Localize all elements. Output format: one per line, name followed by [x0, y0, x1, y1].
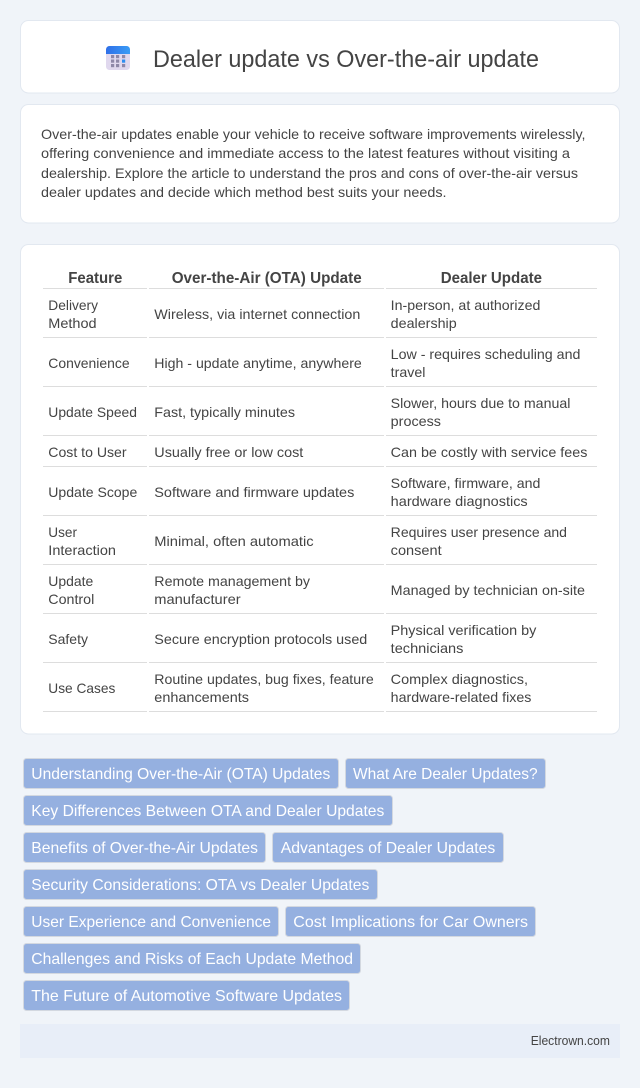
tag: security: Security Considerations: OTA vs Dealer Updates — [31, 877, 369, 894]
row: delivery method: Method — [48, 315, 97, 331]
tag: advantages: Advantages of Dealer Updates — [281, 840, 495, 857]
row: update speed: Fast, typically minutes — [154, 404, 295, 420]
tag: future — [24, 980, 350, 1010]
row: user interaction: Interaction — [48, 542, 116, 558]
row: update scope: Software and firmware updates — [154, 484, 354, 500]
row: update control: Remote management by — [154, 573, 310, 589]
panel: introduction — [20, 104, 620, 223]
row: update scope: Software, firmware, and — [391, 475, 540, 491]
row: delivery method: Delivery — [48, 297, 98, 313]
tag: key differences: Key Differences Between OTA and Dealer Updates — [31, 803, 384, 820]
row: convenience: travel — [391, 364, 425, 380]
row: update control: Managed by technician on-site — [391, 582, 585, 598]
row: cost to user — [48, 444, 587, 460]
tag: key differences — [24, 796, 392, 826]
row: safety: Physical verification by — [391, 622, 536, 638]
tag: future: The Future of Automotive Software Updates — [31, 988, 342, 1005]
row: update control — [48, 573, 585, 607]
tag: what are dealer updates: What Are Dealer Updates? — [353, 766, 538, 783]
row: update control: Control — [48, 591, 94, 607]
row: convenience: Convenience — [48, 355, 130, 371]
footer: Electrown.com — [531, 1034, 610, 1048]
row: delivery method — [48, 297, 540, 331]
row: update speed: process — [391, 413, 441, 429]
tag: understanding OTA: Understanding Over-the-Air (OTA) Updates — [31, 766, 330, 783]
row: use cases — [48, 671, 531, 705]
intro text — [41, 126, 586, 200]
tag: user experience: User Experience and Convenience — [31, 914, 271, 931]
table header: Feature — [68, 270, 122, 287]
row: use cases: Use Cases — [48, 680, 115, 696]
tag: benefits — [24, 832, 266, 862]
icon: calendar — [106, 46, 130, 70]
row: use cases: Complex diagnostics, — [391, 671, 528, 687]
row: use cases: enhancements — [154, 689, 249, 705]
row: user interaction — [48, 524, 567, 558]
row: update speed — [48, 395, 570, 429]
row: convenience: High - update anytime, anywhere — [154, 355, 362, 371]
row: cost to user: Can be costly with service fees — [391, 444, 587, 460]
table rule lines — [43, 288, 597, 712]
table header: Dealer Update — [441, 270, 542, 287]
row: cost to user: Usually free or low cost — [154, 444, 303, 460]
tag: security — [24, 870, 378, 900]
intro text: Over-the-air updates enable your vehicle to receive software improvements wirelessly, — [41, 126, 586, 142]
row: safety: technicians — [391, 640, 463, 656]
table header: Over-the-Air (OTA) Update — [172, 270, 362, 287]
footer — [20, 1024, 620, 1058]
title text: Dealer update vs Over-the-air update — [153, 46, 539, 73]
row: use cases: hardware-related fixes — [391, 689, 531, 705]
row: safety: Secure encryption protocols used — [154, 631, 367, 647]
tag: challenges — [24, 944, 360, 974]
row: user interaction: consent — [391, 542, 442, 558]
row: safety — [48, 622, 536, 656]
intro text: offering convenience and immediate access to the latest features without visiting a — [41, 145, 570, 161]
row: cost to user: Cost to User — [48, 444, 127, 460]
row: update scope: Update Scope — [48, 484, 138, 500]
intro text: dealership. Explore the article to understand the pros and cons of over-the-air versus — [41, 165, 578, 181]
row: convenience: Low - requires scheduling and — [391, 346, 580, 362]
row: update scope — [48, 475, 540, 509]
row: user interaction: Minimal, often automatic — [154, 533, 314, 549]
row: use cases: Routine updates, bug fixes, feature — [154, 671, 374, 687]
row: update speed: Slower, hours due to manual — [391, 395, 570, 411]
tag: benefits: Benefits of Over-the-Air Updates — [31, 840, 258, 857]
row: convenience — [48, 346, 580, 380]
row: update control: Update — [48, 573, 94, 589]
row: update control: manufacturer — [154, 591, 241, 607]
tag: advantages — [272, 832, 504, 862]
intro text: dealer updates and decide which method best suits your needs. — [41, 184, 447, 200]
table header — [68, 270, 542, 287]
row: user interaction: Requires user presence and — [391, 524, 567, 540]
panel: comparison table — [20, 244, 620, 734]
tag: cost implications: Cost Implications for Car Owners — [293, 914, 528, 931]
tag: what are dealer updates — [346, 758, 546, 788]
tag: challenges: Challenges and Risks of Each Update Method — [31, 951, 353, 968]
panel: title — [20, 20, 620, 93]
row: delivery method: Wireless, via internet connection — [154, 306, 360, 322]
row: safety: Safety — [48, 631, 88, 647]
tag: cost implications — [286, 906, 536, 936]
row: update scope: hardware diagnostics — [391, 493, 528, 509]
row: update speed: Update Speed — [48, 404, 137, 420]
row: delivery method: In-person, at authorized — [391, 297, 540, 313]
tag: user experience — [24, 906, 278, 936]
topic tags — [24, 758, 546, 1010]
row: delivery method: dealership — [391, 315, 457, 331]
row: user interaction: User — [48, 524, 77, 540]
tag: understanding OTA — [24, 758, 338, 788]
